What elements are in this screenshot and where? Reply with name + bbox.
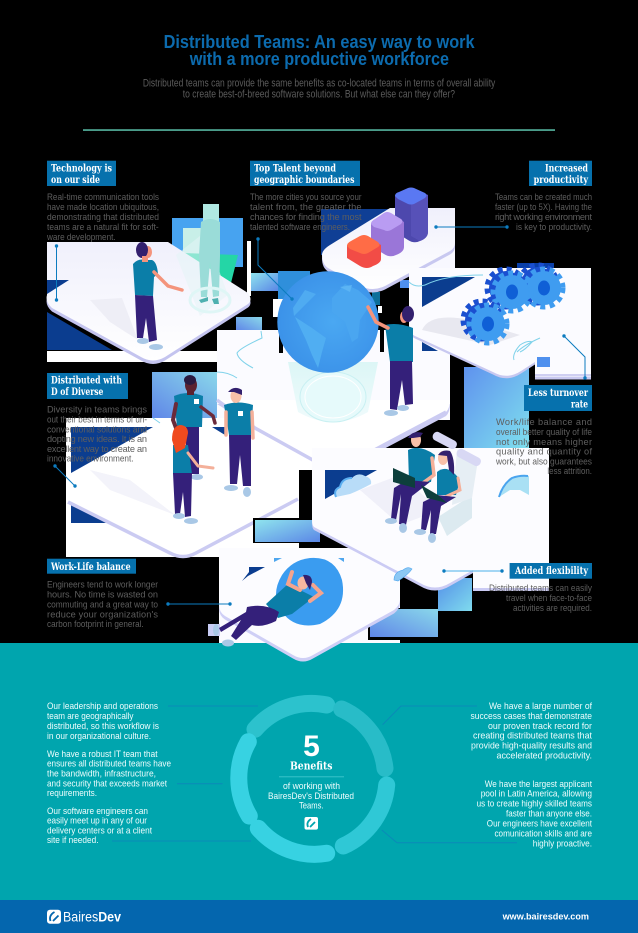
connector: flexibility xyxy=(442,569,504,573)
benefit text: success cases: provide high-quality results and xyxy=(471,741,592,752)
text block: technology: ware development. xyxy=(46,232,116,242)
benefit text: leadership xyxy=(47,701,159,742)
heading: flexibility: Added flexibility xyxy=(514,566,588,577)
gradient backdrop panels xyxy=(152,271,529,448)
text block: increased productivity: faster (up to 5X). Having the xyxy=(495,202,592,212)
panel: increased productivity text xyxy=(495,161,592,232)
heading: work-life: Work-Life balance xyxy=(50,562,131,573)
benefit text: success cases xyxy=(470,701,592,761)
ring centre text: Benefits xyxy=(290,760,332,772)
heading: less turnover: Less turnover xyxy=(528,388,589,399)
text block: increased productivity: Teams can be created much xyxy=(495,192,592,202)
text block: work-life: carbon footprint in general. xyxy=(47,619,144,629)
platform: work-life xyxy=(208,548,439,662)
benefit text: engineers xyxy=(47,806,152,846)
icon: clouds xyxy=(335,474,529,581)
text block: diverse: out their best in terms of un- xyxy=(47,415,147,425)
wires xyxy=(153,275,540,423)
benefit text: IT team xyxy=(47,749,171,799)
text block: work-life: Engineers tend to work longer xyxy=(47,580,158,590)
globe with glass base xyxy=(277,271,379,422)
text block: diverse: dopting new ideas. It is an xyxy=(47,434,147,444)
platform: blocks xyxy=(321,208,455,292)
heading: top talent: Top Talent beyond xyxy=(254,164,336,174)
panel: diverse text xyxy=(47,373,147,464)
text block: increased productivity: right working environment xyxy=(495,212,592,222)
icon: gears xyxy=(463,265,563,343)
text block: technology: have made location ubiquitous, xyxy=(47,202,159,212)
text block: diverse: excellent way to create an xyxy=(47,444,147,454)
text block: less turnover xyxy=(495,417,592,476)
benefit text: IT team: ensures all distributed teams have xyxy=(47,759,171,770)
footer logo: BairesDev xyxy=(63,910,121,924)
text block: less turnover: work, but also guarantees xyxy=(495,456,592,466)
heading: technology: Technology is xyxy=(51,164,112,174)
benefit text: engineers: delivery centers or at a client xyxy=(47,825,152,836)
text block: flexibility xyxy=(489,583,592,613)
text block: flexibility: activities are required. xyxy=(513,603,592,613)
text block: top talent xyxy=(250,192,362,232)
ring centre text: of working with xyxy=(283,781,340,792)
ring centre text: Teams. xyxy=(299,800,324,812)
text block: diverse: Diversity in teams brings xyxy=(47,405,147,415)
benefit text: IT team: and security that exceeds market xyxy=(47,778,167,789)
text block: top talent: The more cities you source your xyxy=(250,192,362,202)
panel: top talent text xyxy=(250,161,362,232)
text block: less turnover: less attrition. xyxy=(547,466,592,476)
hologram backdrop xyxy=(172,218,250,318)
connector: top talent xyxy=(256,237,294,301)
text block: technology xyxy=(46,192,159,242)
connector: technology xyxy=(55,244,58,302)
footer website: www.bairesdev.com xyxy=(502,912,589,922)
text block: top talent: talent from, the greater the xyxy=(250,202,362,212)
text block: work-life: reduce your organization's xyxy=(47,609,158,619)
subtitle: to create best-of-breed software solutions. But what else can they offer? xyxy=(183,88,455,100)
heading: less turnover: rate xyxy=(571,399,588,410)
person: relaxing on bean bag xyxy=(213,558,343,646)
panel: less turnover text xyxy=(495,385,592,476)
benefit text: engineers: Our software engineers can xyxy=(47,806,148,817)
heading: diverse: Distributed with xyxy=(51,376,122,386)
text block: work-life: commuting and a great way to xyxy=(47,599,158,609)
text block: top talent: chances for finding the most xyxy=(250,212,362,222)
heading: technology xyxy=(47,161,116,186)
text block: increased productivity xyxy=(495,192,592,232)
heading: less turnover xyxy=(524,385,592,411)
benefit text: leadership: team are geographically xyxy=(47,711,134,722)
benefit text: engineers: site if needed. xyxy=(47,835,98,846)
benefit text: IT team: requirements. xyxy=(47,788,97,799)
benefit text: applicant pool: us to create highly skilled teams xyxy=(477,799,592,810)
title: Distributed Teams: An easy way to work xyxy=(164,32,475,52)
heading: diverse: D of Diverse xyxy=(51,387,103,398)
benefit text: success cases: success cases that demonstrate xyxy=(470,711,592,722)
text block: technology: Real-time communication tools xyxy=(47,192,159,202)
text block: diverse: conventional solutions and xyxy=(47,424,147,434)
platform: technology xyxy=(47,241,251,364)
connector: work-life xyxy=(166,602,232,606)
subtitle: Distributed teams can provide the same benefits as co-located teams in terms of overall ability xyxy=(143,78,496,90)
panel: technology text xyxy=(46,161,159,242)
text block: technology: demonstrating that distributed xyxy=(47,212,159,222)
benefit text: applicant pool: faster than anyone else. xyxy=(506,809,592,820)
heading: increased productivity xyxy=(529,161,592,186)
footer band xyxy=(0,900,638,933)
benefit text: IT team: the bandwidth, infrastructure, xyxy=(47,768,156,779)
subtitle xyxy=(143,78,496,100)
arrows: benefit connectors xyxy=(112,706,517,843)
benefit text: applicant pool xyxy=(477,779,592,849)
ring chart: five segments xyxy=(239,703,387,854)
benefit text: leadership: in our organizational culture. xyxy=(47,731,151,742)
platform: gears xyxy=(409,263,591,380)
text block: flexibility: travel when face-to-face xyxy=(506,593,592,603)
text block: top talent: talented software engineers. xyxy=(250,222,350,232)
gradient panel lower middle xyxy=(253,470,322,548)
heading: diverse xyxy=(47,373,128,399)
benefit text: leadership: Our leadership and operations xyxy=(47,701,158,712)
text block: increased productivity: is key to productivity. xyxy=(516,222,592,232)
connector: productivity xyxy=(434,225,509,229)
people: diverse group xyxy=(172,375,253,524)
title divider line xyxy=(83,129,555,131)
heading: top talent xyxy=(250,161,360,186)
isometric illustration xyxy=(47,188,591,662)
benefit text: applicant pool: pool in Latin America, allowing xyxy=(481,789,592,800)
panel: work-life text xyxy=(47,559,158,629)
ring centre text: 5 xyxy=(303,730,320,763)
text block: less turnover: overall better quality of life xyxy=(496,427,592,437)
benefit text: applicant pool: Our engineers have excellent xyxy=(487,819,592,830)
text block: less turnover: quality and quantity of xyxy=(496,447,592,457)
heading: increased productivity: Increased xyxy=(545,164,588,174)
person: engineer touching globe xyxy=(368,306,414,416)
benefit text: success cases: accelerated productivity. xyxy=(496,750,592,761)
platform: chairs xyxy=(312,448,549,611)
platform: diverse team xyxy=(66,400,446,557)
icon: ring logo xyxy=(304,817,318,830)
people: couple on seats with laptops xyxy=(385,430,482,543)
text block: technology: teams are a natural fit for soft- xyxy=(47,222,159,232)
connector: diverse xyxy=(53,464,77,488)
benefit text: success cases: creating distributed teams that xyxy=(473,731,592,742)
benefit text: IT team: We have a robust IT team that xyxy=(47,749,158,760)
benefit text: success cases: our proven track record for xyxy=(488,721,592,732)
text block: diverse xyxy=(47,405,147,464)
text block: diverse: innovative environment. xyxy=(47,454,134,464)
benefit text: applicant pool: highly proactive. xyxy=(533,838,592,849)
text block: flexibility: Distributed teams can easily xyxy=(489,583,592,593)
person: engineer with hologram xyxy=(133,204,230,350)
title xyxy=(164,32,475,69)
text block: less turnover: not only means higher xyxy=(496,437,592,447)
benefit text: engineers: easily meet up in any of our xyxy=(47,816,147,827)
connector: less turnover xyxy=(562,334,587,380)
benefit text: applicant pool: We have the largest applicant xyxy=(485,779,592,790)
teal benefits background xyxy=(0,643,638,900)
text block: work-life: hours. No time is wasted on xyxy=(47,589,158,599)
heading: increased productivity: productivity xyxy=(534,175,588,186)
text block: work-life xyxy=(47,580,158,629)
ring centre text: BairesDev's Distributed xyxy=(268,791,354,802)
heading: top talent: geographic boundaries xyxy=(254,175,355,186)
heading: technology: on our side xyxy=(51,175,100,186)
panel: flexibility text xyxy=(489,563,592,613)
ring centre text xyxy=(268,730,354,812)
benefit text: leadership: distributed, so this workflow is xyxy=(47,721,159,732)
benefit text: applicant pool: comunication skills and are xyxy=(494,828,592,839)
platform: globe base xyxy=(217,330,450,472)
benefit text: success cases: We have a large number of xyxy=(489,701,592,712)
bars: stacked blocks xyxy=(347,188,428,268)
title: with a more productive workforce xyxy=(189,49,449,69)
text block: less turnover: Work/life balance and xyxy=(496,417,592,427)
